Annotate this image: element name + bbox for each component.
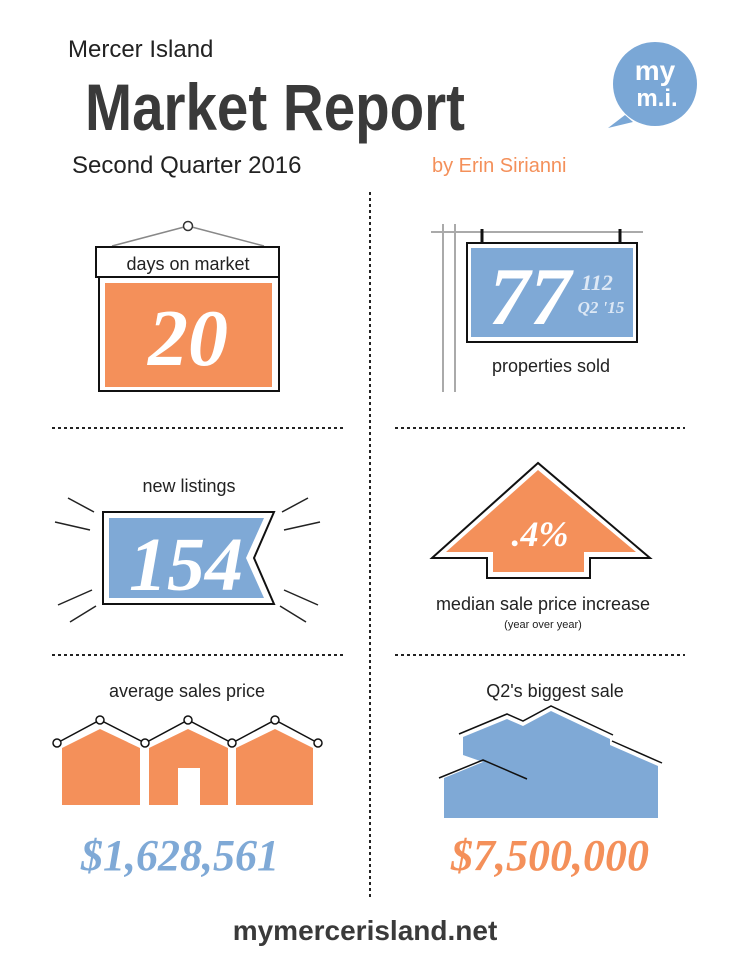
panel: biggest sale — [439, 681, 662, 880]
panel: new listings: 154 — [129, 523, 243, 607]
panel: new listings — [55, 476, 320, 622]
panel: properties sold: 112 — [581, 270, 613, 295]
panel: median sale price: .4% — [512, 514, 568, 554]
panel: days on market: 20 — [147, 295, 228, 383]
panel: properties sold: properties sold — [492, 356, 610, 376]
panel: average sales price: average sales price — [109, 681, 265, 701]
panel: average sales price — [53, 681, 322, 880]
panel: properties sold: Q2 '15 — [578, 298, 625, 317]
panel: average sales price: $1,628,561 — [80, 831, 279, 880]
subtitle: Second Quarter 2016 — [72, 152, 302, 179]
byline: by Erin Sirianni — [432, 155, 567, 177]
panel: new listings: new listings — [142, 476, 236, 496]
panel: biggest sale: $7,500,000 — [450, 831, 649, 880]
title: Market Report: Market Report — [85, 70, 465, 144]
footer: mymercerisland.net — [233, 915, 497, 946]
panel: days on market: days on market — [126, 254, 250, 274]
panel: median sale price — [432, 463, 650, 631]
logo: my — [635, 55, 676, 86]
panel: median sale price: (year over year) — [504, 619, 582, 631]
panel: days on market — [96, 222, 279, 391]
panel: properties sold: 77 — [489, 251, 574, 342]
title: Mercer Island: Mercer Island — [68, 36, 213, 63]
logo: m.i. — [636, 85, 678, 112]
logo — [608, 42, 697, 128]
panel: properties sold — [431, 224, 643, 392]
panel: median sale price: median sale price increase — [436, 594, 650, 614]
panel: biggest sale: Q2's biggest sale — [486, 681, 624, 701]
